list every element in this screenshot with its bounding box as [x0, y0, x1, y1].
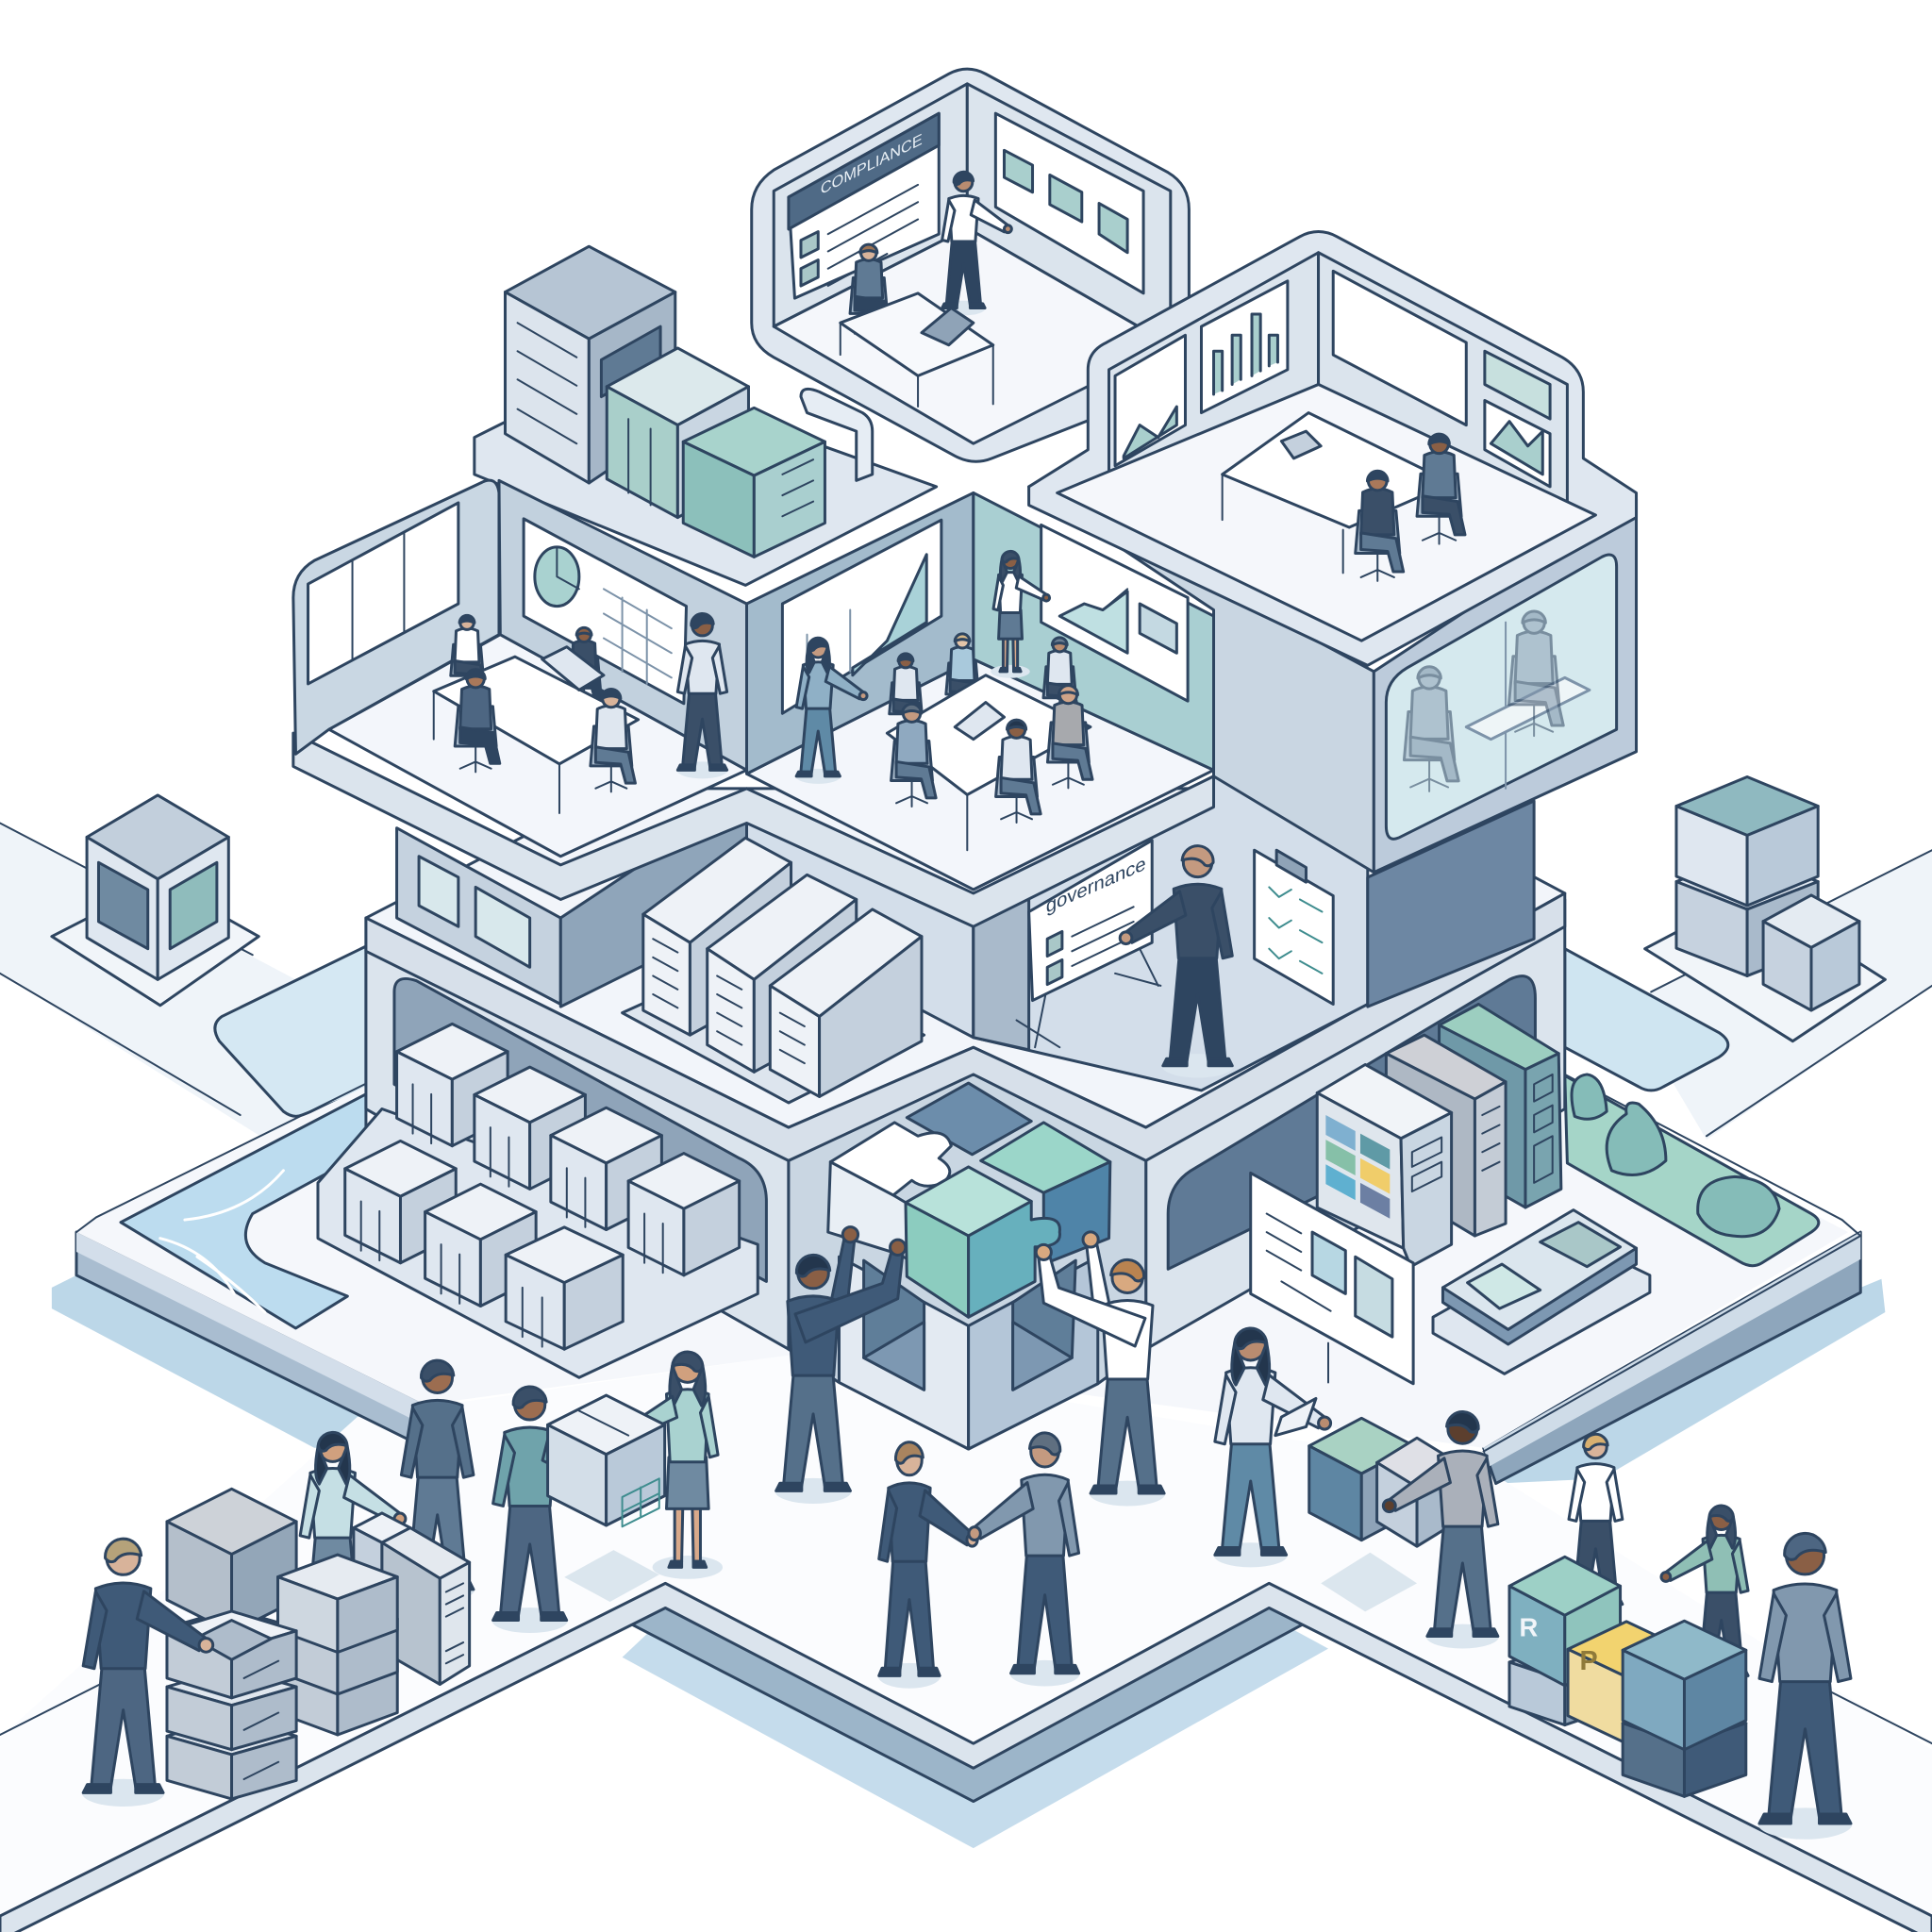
puzzle assembling people — [774, 1227, 1165, 1506]
teal crate — [683, 408, 824, 557]
letter R cube — [1509, 1557, 1621, 1725]
upper left terrace with servers — [475, 246, 937, 585]
window frame — [293, 480, 499, 754]
letter cubes team — [1509, 1434, 1853, 1840]
central column with recesses — [789, 1074, 1146, 1449]
ground shelves — [318, 1024, 758, 1377]
display board with charts — [1251, 1173, 1413, 1384]
letter R cube: R — [1519, 1613, 1538, 1642]
front server with colour panel — [1317, 1064, 1452, 1267]
pie chart screen — [524, 519, 687, 704]
round table — [887, 675, 1091, 850]
back seated people — [890, 654, 924, 734]
front seated man left — [455, 670, 500, 772]
report screen — [995, 113, 1143, 293]
back stack — [167, 1609, 296, 1690]
left server stacks with technician — [82, 1489, 470, 1807]
checklist clipboard — [1255, 850, 1333, 1004]
connecting pipe — [801, 389, 873, 480]
governance whiteboard — [1017, 841, 1160, 1047]
growth chart screen left — [782, 520, 941, 713]
people passing a box — [299, 1352, 723, 1650]
grey server — [1386, 1035, 1506, 1236]
seated woman at project table — [1356, 471, 1404, 581]
puzzle cubes — [828, 1083, 1110, 1317]
garden with bushes — [1565, 1074, 1819, 1266]
cube handler — [1309, 1412, 1499, 1648]
project table — [1223, 413, 1452, 573]
mid level servers — [623, 838, 924, 1103]
governance whiteboard: governance — [1046, 853, 1146, 918]
governance speaker — [1120, 846, 1234, 1077]
front seated right — [1047, 686, 1092, 788]
floor three slab — [293, 635, 1214, 926]
back seated woman — [451, 615, 486, 696]
woman with tablet — [1214, 1328, 1331, 1567]
compliance table — [841, 293, 993, 407]
ground level right wall and opening — [1146, 899, 1565, 1349]
server tower — [506, 246, 675, 483]
bush medium — [1607, 1103, 1666, 1174]
meeting table — [434, 647, 639, 813]
teal puzzle piece — [906, 1167, 1059, 1317]
front seated centre — [996, 720, 1041, 823]
lower platform box — [1433, 1210, 1650, 1374]
standing presenter — [941, 172, 1011, 315]
compliance screen: COMPLIANCE — [821, 129, 923, 198]
back seated man — [568, 627, 603, 708]
back seated blonde — [946, 634, 981, 714]
base platform — [76, 1074, 1860, 1484]
back seated right — [1043, 638, 1078, 718]
compliance screen — [789, 113, 939, 298]
mid level walls — [397, 776, 1534, 1091]
plaza floor and lower chevron edge — [0, 1275, 1932, 1932]
front seated left — [891, 704, 936, 807]
left meeting room — [293, 480, 747, 813]
blue cube stack — [1623, 1621, 1746, 1796]
teal cabinet — [607, 348, 748, 518]
letter P cube — [1568, 1622, 1685, 1743]
centre meeting room — [747, 492, 1214, 850]
seated man at project table — [1417, 434, 1465, 544]
standing woman presenter — [991, 551, 1050, 678]
bush large — [1698, 1176, 1779, 1237]
handshake pair — [878, 1433, 1080, 1689]
right kiosk stack — [1645, 777, 1885, 1041]
left kiosk server — [52, 795, 258, 1006]
white puzzle piece — [828, 1123, 951, 1259]
ground: road strips and pools behind the building — [0, 823, 1932, 1158]
river on the platform — [121, 1094, 366, 1328]
teal server — [1440, 1004, 1561, 1208]
compliance room — [752, 69, 1189, 461]
blue puzzle piece — [981, 1123, 1110, 1264]
standing man pointing — [676, 613, 728, 778]
right ground servers — [1317, 1004, 1561, 1267]
ground level left wall and opening — [366, 918, 789, 1349]
right volume with glass room — [1029, 487, 1637, 873]
letter P cube: P — [1579, 1646, 1598, 1676]
man behind blue stack — [1757, 1533, 1853, 1840]
growth chart screen right — [1041, 525, 1188, 701]
front stack — [167, 1718, 296, 1799]
bush small — [1572, 1074, 1607, 1119]
carried box — [548, 1395, 665, 1526]
large screen and side screens — [1333, 271, 1550, 487]
rear tower — [354, 1513, 470, 1684]
technician — [82, 1539, 213, 1807]
top right room — [1029, 232, 1637, 665]
seated woman — [850, 244, 891, 337]
mid level floor and rim — [366, 789, 1565, 1160]
bar chart screen — [1115, 281, 1288, 466]
middle stack — [278, 1638, 397, 1735]
standing woman with tablet — [795, 638, 867, 784]
front seated man right — [591, 690, 635, 791]
